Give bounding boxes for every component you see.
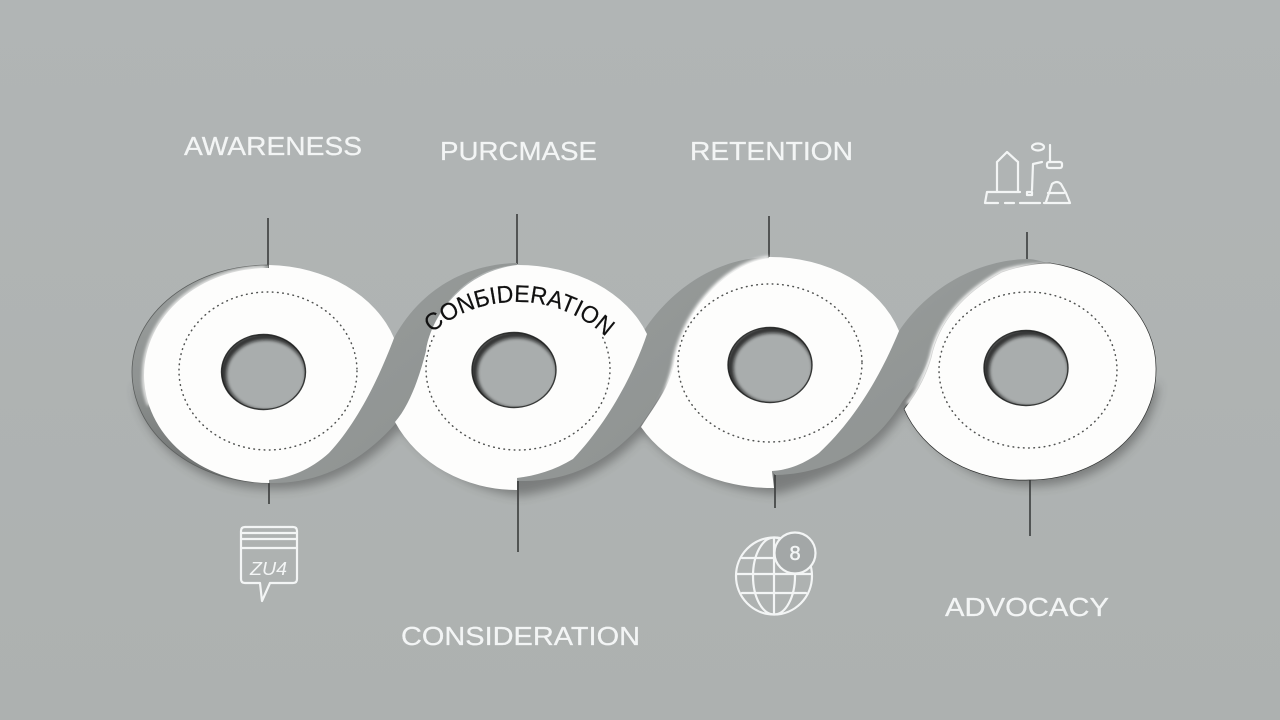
dotted ring [939, 292, 1117, 448]
disc 4: advocacy [904, 263, 1156, 480]
white paper shape [904, 263, 1156, 480]
soft inner edge [646, 258, 769, 426]
disc 1: awareness [144, 265, 394, 483]
band: from disc 3 to disc 2 [517, 257, 769, 481]
soft inner edge [908, 266, 1059, 404]
soft inner edge [144, 268, 265, 405]
centre hole [984, 330, 1072, 410]
icon: speech-bubble document: ZU4 [249, 559, 287, 579]
heading: purchase: PURCMASE [440, 136, 597, 166]
disc 2: consideration [395, 265, 647, 490]
icon: globe with badge [736, 532, 816, 614]
heading: consideration: CONSIDERATION [401, 621, 640, 651]
icon: globe with badge: 8 [789, 543, 801, 565]
dotted ring arc [426, 336, 610, 450]
connector lines [268, 214, 1030, 552]
white paper shape [395, 265, 647, 490]
arc guide [432, 302, 607, 338]
band: from disc 2 to disc 1 [269, 263, 517, 483]
ribbon: folded gray bands [132, 257, 1059, 483]
heading: advocacy: ADVOCACY [945, 592, 1109, 622]
heading: awareness: AWARENESS [184, 131, 362, 161]
band: from disc 4 to disc 3 [772, 259, 1059, 475]
dotted ring [678, 284, 862, 442]
centre hole [222, 334, 309, 414]
white paper shape [144, 265, 394, 483]
soft shadow under ribbon [136, 374, 1159, 496]
centre hole [472, 332, 560, 412]
icon: speech-bubble document [241, 527, 297, 601]
dotted ring [179, 292, 357, 450]
band: left crescent of disc 1 [132, 265, 300, 483]
centre hole [728, 328, 816, 406]
curved label: CONБIDERATION [426, 285, 616, 336]
infographic canvas [132, 136, 1162, 646]
icon: factory and flask [985, 144, 1070, 203]
heading: retention: RETENTION [690, 136, 853, 166]
disc 3: retention [641, 257, 899, 488]
white paper shape [641, 257, 899, 488]
